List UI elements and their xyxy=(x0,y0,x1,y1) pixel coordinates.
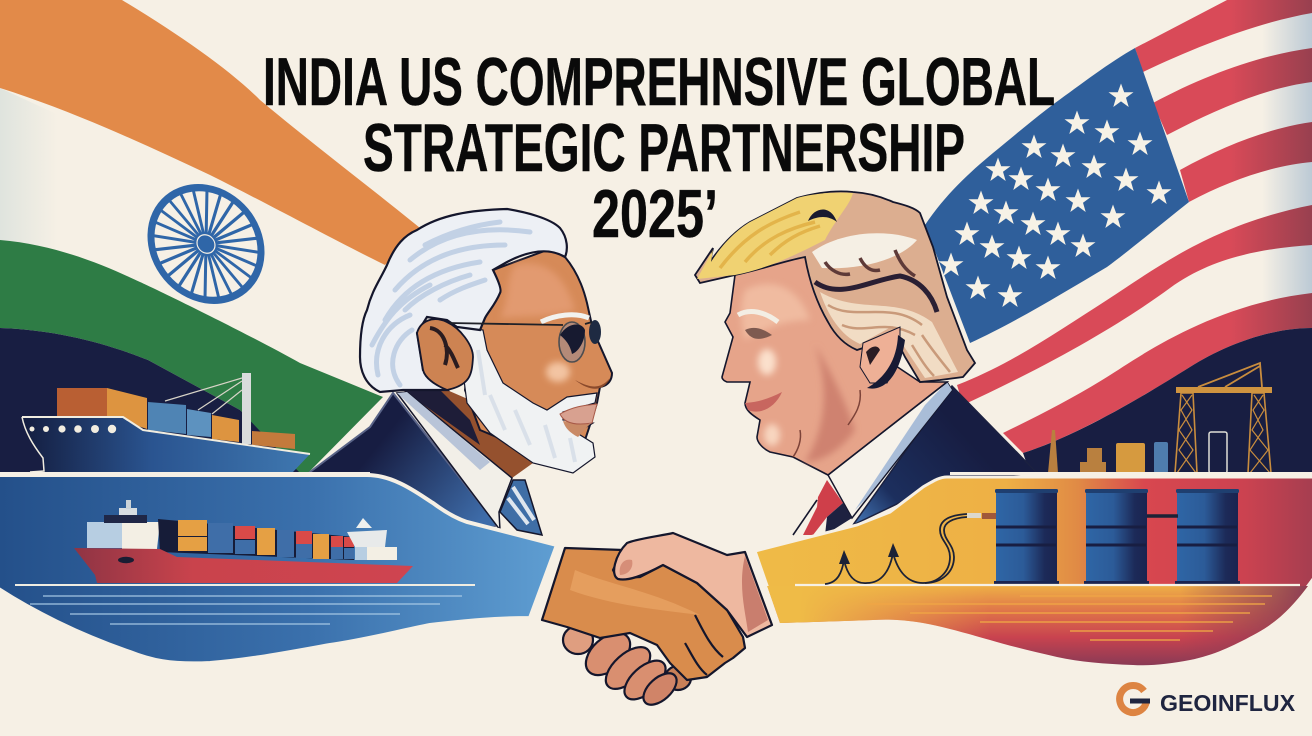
lower band colour wash xyxy=(755,586,1312,670)
cheek shadow xyxy=(805,345,855,462)
collar shade xyxy=(855,382,952,510)
icon: Ashoka Chakra xyxy=(128,165,284,323)
title line 2: STRATEGIC PARTNERSHIP xyxy=(363,110,965,186)
hair strands xyxy=(372,222,530,385)
illustration: oil barrels xyxy=(994,489,1240,584)
ear xyxy=(860,327,900,383)
suit xyxy=(853,386,1037,525)
panel: blue shipping band xyxy=(0,475,557,663)
eyebrow xyxy=(738,311,778,322)
chin highlight xyxy=(764,424,780,446)
dark navy backdrop right xyxy=(1023,328,1312,473)
eyebrow xyxy=(541,315,589,322)
beard xyxy=(457,327,597,473)
finger two xyxy=(599,640,657,696)
left orange hand xyxy=(542,548,745,680)
crane gantry xyxy=(1175,393,1271,473)
face and neck xyxy=(722,250,947,475)
water lines xyxy=(15,584,475,586)
illustration: handshake xyxy=(542,533,772,711)
hair highlight xyxy=(812,233,917,268)
flag green band xyxy=(0,240,383,473)
flag white band xyxy=(0,88,385,397)
forehead highlight xyxy=(500,263,575,318)
shelf line xyxy=(795,584,1300,586)
title xyxy=(263,44,1055,252)
portholes xyxy=(30,425,116,433)
panel: US flag xyxy=(925,0,1312,473)
divider line xyxy=(0,472,1312,475)
tie xyxy=(803,480,843,535)
tie shadow xyxy=(825,503,852,535)
face highlight xyxy=(741,284,810,340)
container stack xyxy=(158,519,354,560)
ship superstructure left xyxy=(87,522,122,548)
blonde front xyxy=(697,193,853,279)
blonde strands xyxy=(720,212,820,268)
neck shadow xyxy=(403,390,480,445)
hair xyxy=(695,191,975,382)
glasses xyxy=(450,320,601,362)
logo: Geoinflux xyxy=(1120,686,1296,716)
illustration: container ship xyxy=(74,500,413,583)
hand shading xyxy=(742,556,768,632)
flag shaded edge xyxy=(1262,0,1312,330)
cheek highlight xyxy=(546,362,570,382)
mouth xyxy=(745,392,782,412)
shirt xyxy=(828,382,952,518)
knuckle lines xyxy=(685,615,723,675)
hair tan strands xyxy=(828,305,950,376)
illustration: oil derricks and tanks xyxy=(1048,363,1272,473)
logo wordmark: GEOINFLUX xyxy=(1160,690,1296,716)
face xyxy=(465,250,612,470)
title line 3: 2025’ xyxy=(592,176,718,252)
jaw line xyxy=(793,390,860,457)
nose shade xyxy=(575,378,610,389)
illustration: pipelines and arrows xyxy=(825,513,1178,584)
neck xyxy=(403,390,533,478)
hair part dark xyxy=(808,209,837,222)
illustration: Indian leader portrait xyxy=(300,209,612,540)
right hand and thumb xyxy=(614,533,772,637)
ship superstructure right xyxy=(355,547,397,560)
tie xyxy=(500,480,542,535)
finger three xyxy=(618,654,672,706)
hand highlight xyxy=(570,570,700,615)
lips xyxy=(560,404,597,424)
chin patch xyxy=(563,421,590,437)
icon: G mark xyxy=(1120,686,1150,713)
illustration: US leader portrait xyxy=(695,191,1037,535)
suit xyxy=(300,393,497,540)
flag saffron band xyxy=(0,0,420,265)
lower thumb xyxy=(563,626,593,654)
barrel 2 xyxy=(1084,489,1149,584)
panel: gold oil band xyxy=(755,477,1312,670)
collar shade xyxy=(397,392,490,470)
barrel 3 xyxy=(1175,489,1240,584)
thumbnail xyxy=(620,560,632,575)
hull xyxy=(74,548,413,583)
water lines right xyxy=(867,596,1272,640)
panel: Indian flag xyxy=(0,0,420,473)
lower hair cream xyxy=(820,292,958,378)
illustration: cargo ship upper left xyxy=(22,373,310,472)
barrel 1 xyxy=(994,489,1059,584)
crane mast xyxy=(242,373,251,444)
orange lower finger xyxy=(665,666,691,690)
containers xyxy=(57,388,107,416)
dark hair streaks xyxy=(815,276,937,312)
hair xyxy=(360,209,567,392)
cheek highlight xyxy=(758,349,776,375)
shirt collar xyxy=(397,392,512,530)
finger four xyxy=(638,667,682,711)
red stripes xyxy=(957,0,1312,453)
hull xyxy=(22,417,310,472)
ear shadow xyxy=(867,335,905,389)
beard texture xyxy=(478,350,575,462)
eye xyxy=(745,328,772,339)
star canton xyxy=(925,48,1189,343)
dark navy backdrop xyxy=(0,328,300,473)
ear xyxy=(417,319,473,390)
finger one xyxy=(578,625,638,683)
inner ear xyxy=(430,328,458,368)
